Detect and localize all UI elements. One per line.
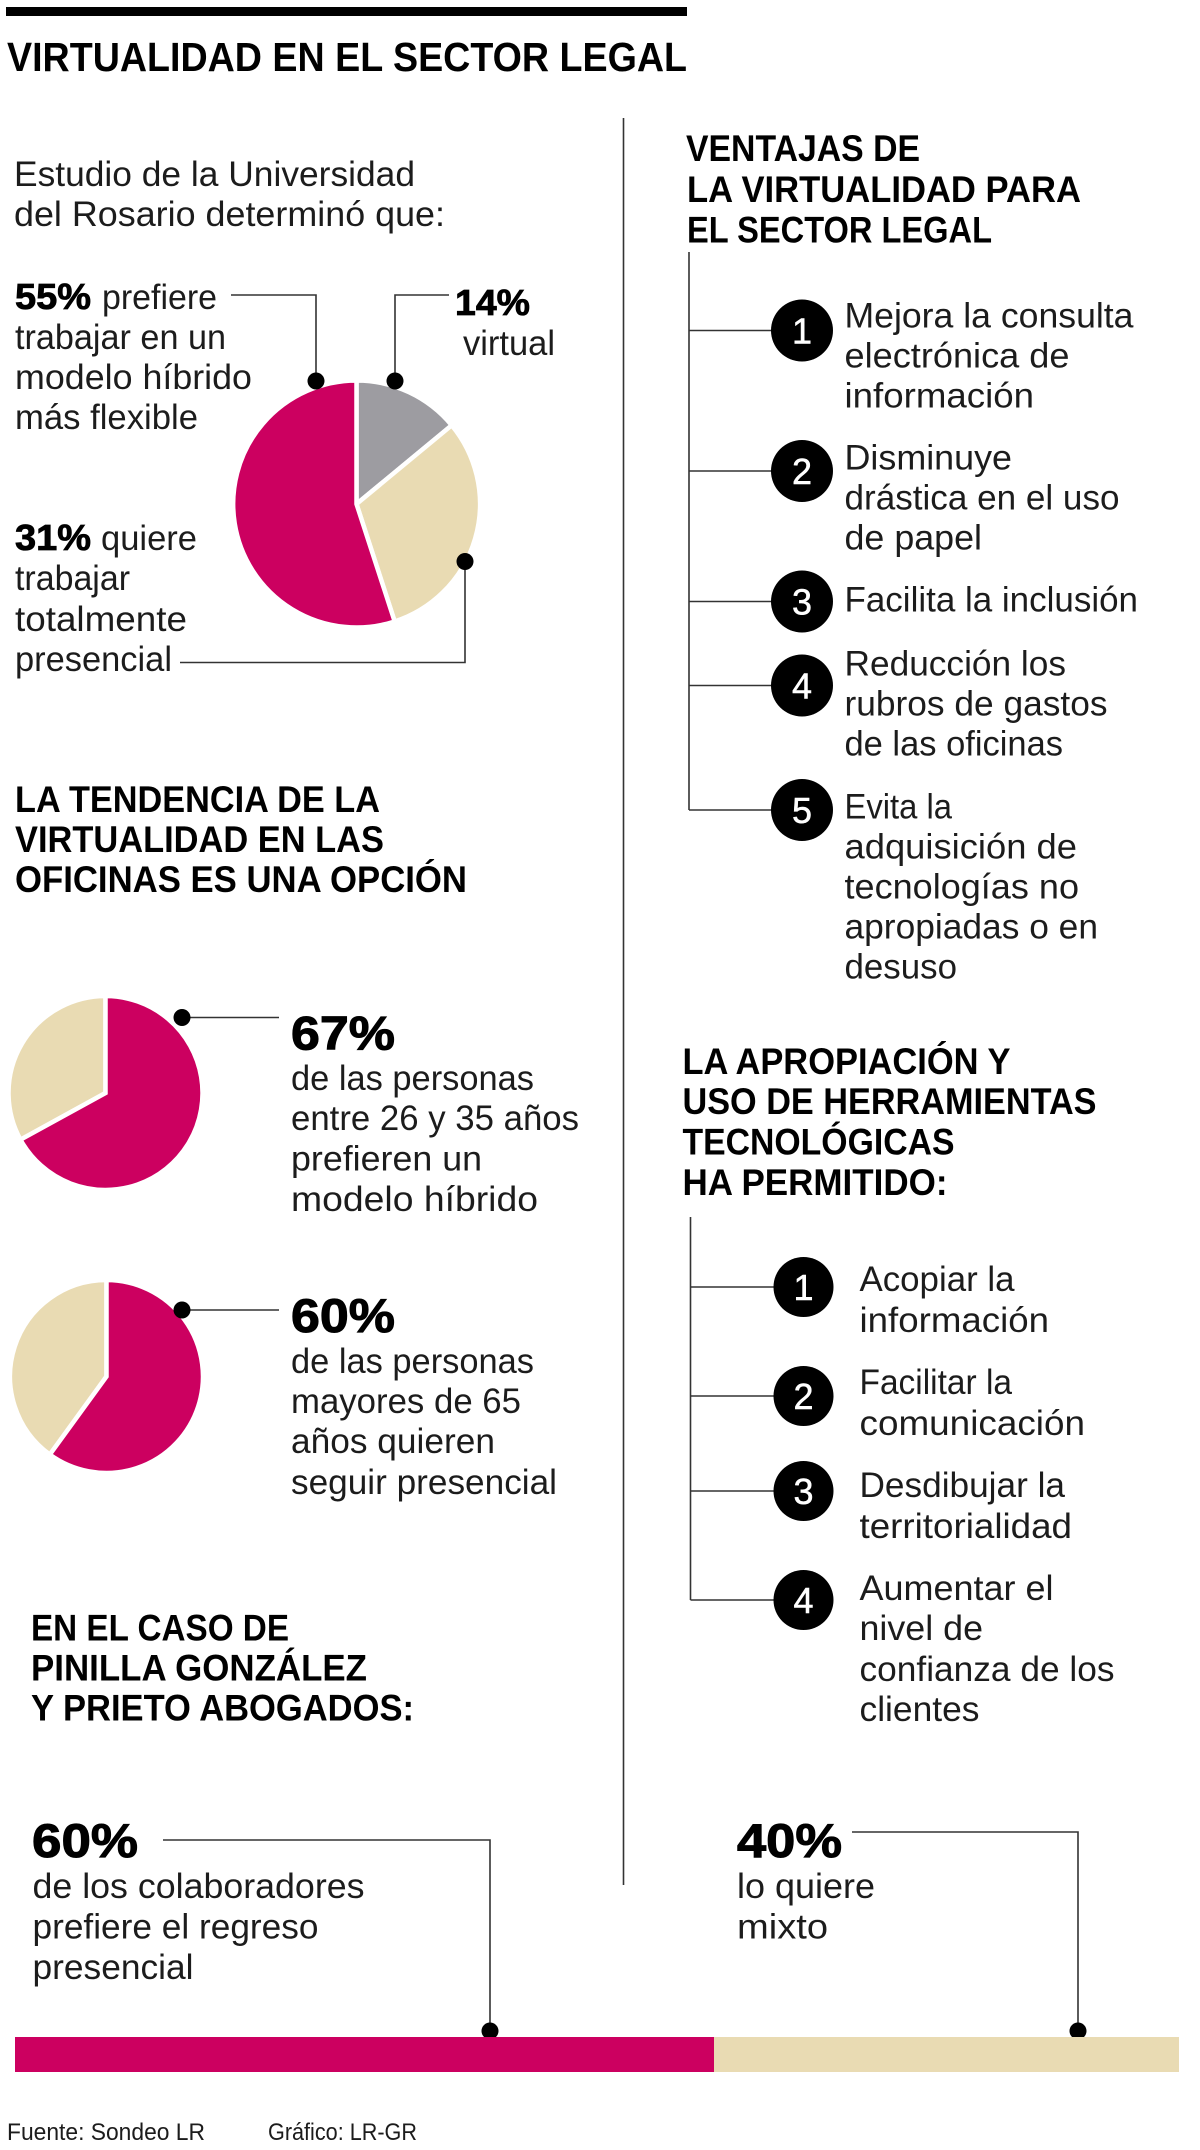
heading: office trend: VIRTUALIDAD EN LAS	[15, 819, 384, 860]
item 2: Disminuye	[844, 438, 1012, 478]
item 4: 4	[792, 666, 812, 706]
callout: 55% hybrid	[15, 276, 324, 437]
callout: 60% stat: seguir presencial	[291, 1463, 557, 1502]
heading: law firm case: EN EL CASO DE	[31, 1608, 289, 1648]
item 2: drástica en el uso	[844, 478, 1120, 518]
callout: 40% mixed: mixto	[737, 1908, 828, 1946]
item 1: 1	[792, 310, 812, 352]
pie chart: 67%	[9, 996, 203, 1190]
callout: 31% in person: totalmente	[15, 600, 187, 639]
column divider	[622, 118, 624, 1885]
heading: law firm case	[31, 1608, 414, 1728]
tool 1: información	[860, 1301, 1049, 1340]
callout: 55% hybrid: 55%	[15, 276, 91, 317]
item 4	[771, 644, 1108, 764]
heading: tools: LA APROPIACIÓN Y	[682, 1040, 1011, 1082]
item 5: Evita la	[844, 788, 952, 826]
callout: 31% in person: trabajar	[15, 559, 130, 598]
item 4: Reducción los	[844, 644, 1066, 684]
item 3: Facilita la inclusión	[844, 580, 1138, 620]
item 4: rubros de gastos	[844, 684, 1108, 724]
heading: advantages	[686, 128, 1081, 250]
callout: 14% virtual	[386, 282, 555, 390]
tool 3	[774, 1461, 1072, 1546]
tool 2: comunicación	[860, 1404, 1085, 1443]
callout: 55% hybrid: modelo híbrido	[15, 358, 252, 397]
item 2: de papel	[844, 518, 982, 558]
tool 3: territorialidad	[860, 1507, 1072, 1546]
tool 3: Desdibujar la	[860, 1466, 1066, 1505]
heading: office trend	[15, 779, 467, 900]
item 5: 5	[792, 790, 812, 831]
pie chart: study results	[233, 380, 480, 627]
callout: 31% in person: presencial	[15, 640, 172, 679]
callout: 60% stat: mayores de 65	[291, 1382, 521, 1421]
item 2: 2	[792, 451, 812, 492]
heading: advantages: VENTAJAS DE	[686, 128, 920, 169]
pie chart: 60%	[10, 1280, 203, 1473]
item 3	[771, 570, 1138, 632]
callout: 40% mixed	[737, 1814, 1086, 2040]
item 4: de las oficinas	[844, 724, 1063, 764]
heading: office trend: LA TENDENCIA DE LA	[15, 779, 380, 820]
callout: 55% hybrid: más flexible	[15, 398, 198, 437]
credit: Gráfico: LR-GR	[268, 2119, 417, 2146]
item 2	[771, 438, 1120, 558]
callout: 60% in person: de los colaboradores	[32, 1867, 364, 1906]
callout: 60% stat: años quieren	[291, 1422, 495, 1461]
heading: office trend: OFICINAS ES UNA OPCIÓN	[15, 858, 467, 900]
callout: 31% in person	[15, 517, 474, 679]
callout: 55% hybrid: trabajar en un	[15, 318, 226, 357]
tool 4: nivel de	[860, 1609, 983, 1648]
callout: 31% in person: 31%	[15, 517, 91, 558]
callout: 67% stat: modelo híbrido	[291, 1180, 538, 1219]
heading: law firm case: Y PRIETO ABOGADOS:	[31, 1688, 414, 1728]
tool 1: Acopiar la	[860, 1260, 1015, 1299]
heading: advantages: LA VIRTUALIDAD PARA	[687, 169, 1081, 210]
callout: 60% in person: prefiere el regreso	[32, 1908, 318, 1946]
item 5: tecnologías no	[844, 868, 1079, 906]
tree connector: tools	[690, 1217, 802, 1600]
tool 4: clientes	[860, 1690, 980, 1729]
intro text	[14, 155, 445, 234]
heading: advantages: EL SECTOR LEGAL	[687, 210, 992, 250]
tool 2	[774, 1363, 1085, 1443]
callout: 67% stat: prefieren un	[291, 1140, 482, 1178]
item 1: información	[844, 376, 1034, 416]
heading: tools: HA PERMITIDO:	[682, 1162, 948, 1203]
callout: 67% stat	[174, 1006, 579, 1219]
title	[6, 7, 687, 80]
intro text: del Rosario determinó que:	[14, 195, 445, 234]
callout: 60% in person: presencial	[32, 1948, 194, 1987]
tool 1: 1	[793, 1267, 814, 1308]
tool 2: Facilitar la	[860, 1363, 1013, 1402]
item 5: desuso	[844, 948, 957, 986]
tool 2: 2	[793, 1376, 814, 1417]
callout: 67% stat: entre 26 y 35 años	[291, 1099, 579, 1138]
callout: 67% stat: de las personas	[291, 1059, 534, 1098]
item 1	[771, 296, 1134, 416]
tool 3: 3	[793, 1471, 814, 1512]
callout: 40% mixed: lo quiere	[737, 1867, 875, 1906]
heading: tools	[682, 1040, 1096, 1203]
item 3: 3	[792, 582, 812, 622]
callout: 40% mixed: 40%	[737, 1814, 842, 1867]
callout: 60% stat: 60%	[291, 1289, 395, 1342]
tool 4: Aumentar el	[860, 1569, 1054, 1608]
heading: tools: USO DE HERRAMIENTAS	[682, 1081, 1096, 1122]
intro text: Estudio de la Universidad	[14, 155, 415, 194]
item 1: electrónica de	[844, 336, 1070, 376]
tool 1	[774, 1257, 1049, 1340]
item 5	[771, 779, 1098, 986]
tree connector: advantages	[689, 252, 800, 810]
callout: 60% stat: de las personas	[291, 1342, 534, 1381]
item 5: apropiadas o en	[844, 908, 1098, 946]
title: VIRTUALIDAD EN EL SECTOR LEGAL	[7, 34, 687, 80]
item 1: Mejora la consulta	[844, 296, 1134, 336]
callout: 60% stat	[174, 1289, 557, 1502]
callout: 55% hybrid: prefiere	[102, 278, 217, 317]
heading: law firm case: PINILLA GONZÁLEZ	[31, 1648, 367, 1688]
callout: 60% in person	[32, 1814, 498, 2040]
heading: tools: TECNOLÓGICAS	[682, 1120, 954, 1162]
callout: 14% virtual: virtual	[463, 324, 555, 363]
callout: 31% in person: quiere	[101, 519, 197, 558]
stacked bar 60/40	[15, 2037, 1179, 2072]
callout: 67% stat: 67%	[291, 1006, 395, 1060]
callout: 60% in person: 60%	[32, 1814, 138, 1867]
item 5: adquisición de	[844, 828, 1077, 866]
tool 4: confianza de los	[860, 1650, 1114, 1689]
source: Fuente: Sondeo LR	[7, 2119, 205, 2146]
callout: 14% virtual: 14%	[455, 282, 530, 323]
tool 4	[774, 1569, 1114, 1729]
tool 4: 4	[793, 1580, 814, 1621]
